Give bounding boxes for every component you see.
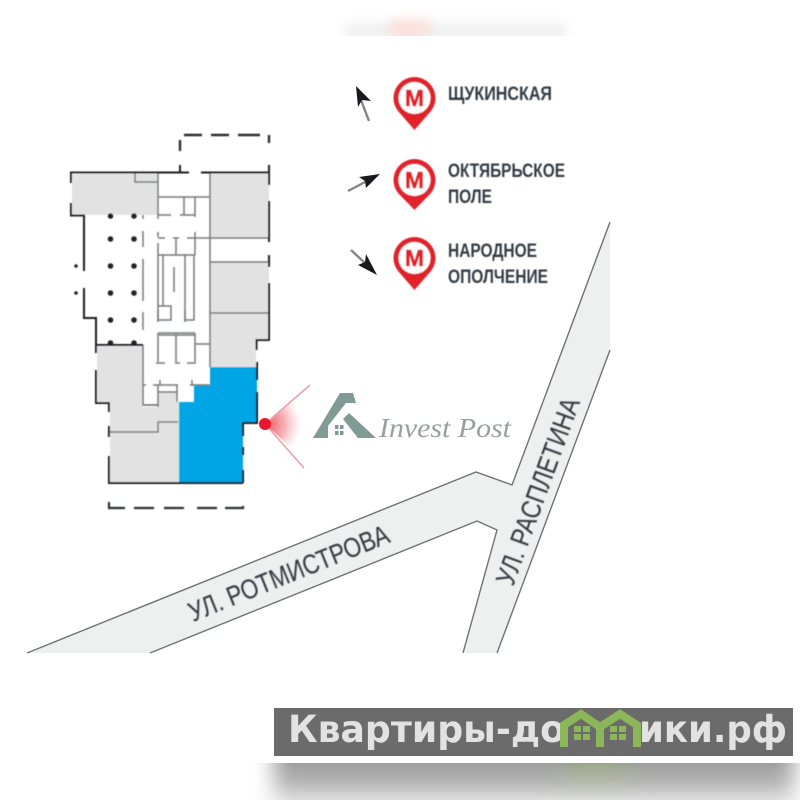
bottom watermark banner: [274, 708, 793, 756]
label: Narodnoye Opolcheniye: НАРОДНОЕ: [448, 241, 537, 262]
road: streets fill: [27, 222, 610, 653]
metro pin: Oktyabrskoye Pole: М: [405, 167, 424, 193]
fan edges: [265, 385, 310, 468]
street label: Rotmistrova: УЛ. РОТМИСТРОВА: [184, 519, 394, 628]
floor plan: [71, 135, 269, 508]
selected apartment: [179, 367, 257, 483]
street map: [27, 222, 610, 653]
arrow: to Shchukinskaya: [356, 86, 371, 121]
arrow: to Narodnoye Opolcheniye: [351, 250, 377, 275]
banner background: [274, 708, 793, 756]
label: Narodnoye Opolcheniye: ОПОЛЧЕНИЕ: [448, 267, 548, 288]
label: Shchukinskaya: ЩУКИНСКАЯ: [448, 84, 552, 105]
dashed outline: lower: [109, 502, 243, 508]
label: Oktyabrskoye Pole: ПОЛЕ: [448, 187, 492, 208]
icon: green houses: [564, 714, 637, 747]
road: edges: [27, 222, 610, 653]
interior walls: [109, 172, 269, 432]
metro pin: Shchukinskaya: [393, 77, 436, 130]
camera marker: [259, 385, 310, 468]
banner text: left part: Квартиры-до: [288, 708, 565, 751]
bottom blurred reflection: [274, 758, 794, 800]
metro pin: Oktyabrskoye Pole: [394, 159, 435, 210]
metro pin: Shchukinskaya: М: [405, 85, 424, 111]
top blurred reflection: [345, 20, 565, 38]
red dot: [259, 418, 271, 430]
exterior walls: [71, 165, 269, 483]
arrow: to Oktyabrskoye Pole: [348, 174, 380, 191]
street label: Raspletina: УЛ. РАСПЛЕТИНА: [490, 393, 586, 589]
metro pin: Narodnoye Opolcheniye: [394, 237, 435, 290]
columns: [74, 213, 137, 346]
logo text: Invest Post: [378, 413, 513, 443]
logo mark: [313, 393, 376, 438]
metro pin: Narodnoye Opolcheniye: М: [405, 245, 424, 271]
banner text: right part: ики.рф: [639, 708, 787, 751]
view fan: [265, 400, 302, 449]
dashed outline: upper: [180, 135, 269, 151]
watermark logo: Invest Post: [313, 393, 513, 443]
gray rooms: [72, 173, 269, 483]
label: Oktyabrskoye Pole: ОКТЯБРЬСКОЕ: [448, 161, 565, 182]
